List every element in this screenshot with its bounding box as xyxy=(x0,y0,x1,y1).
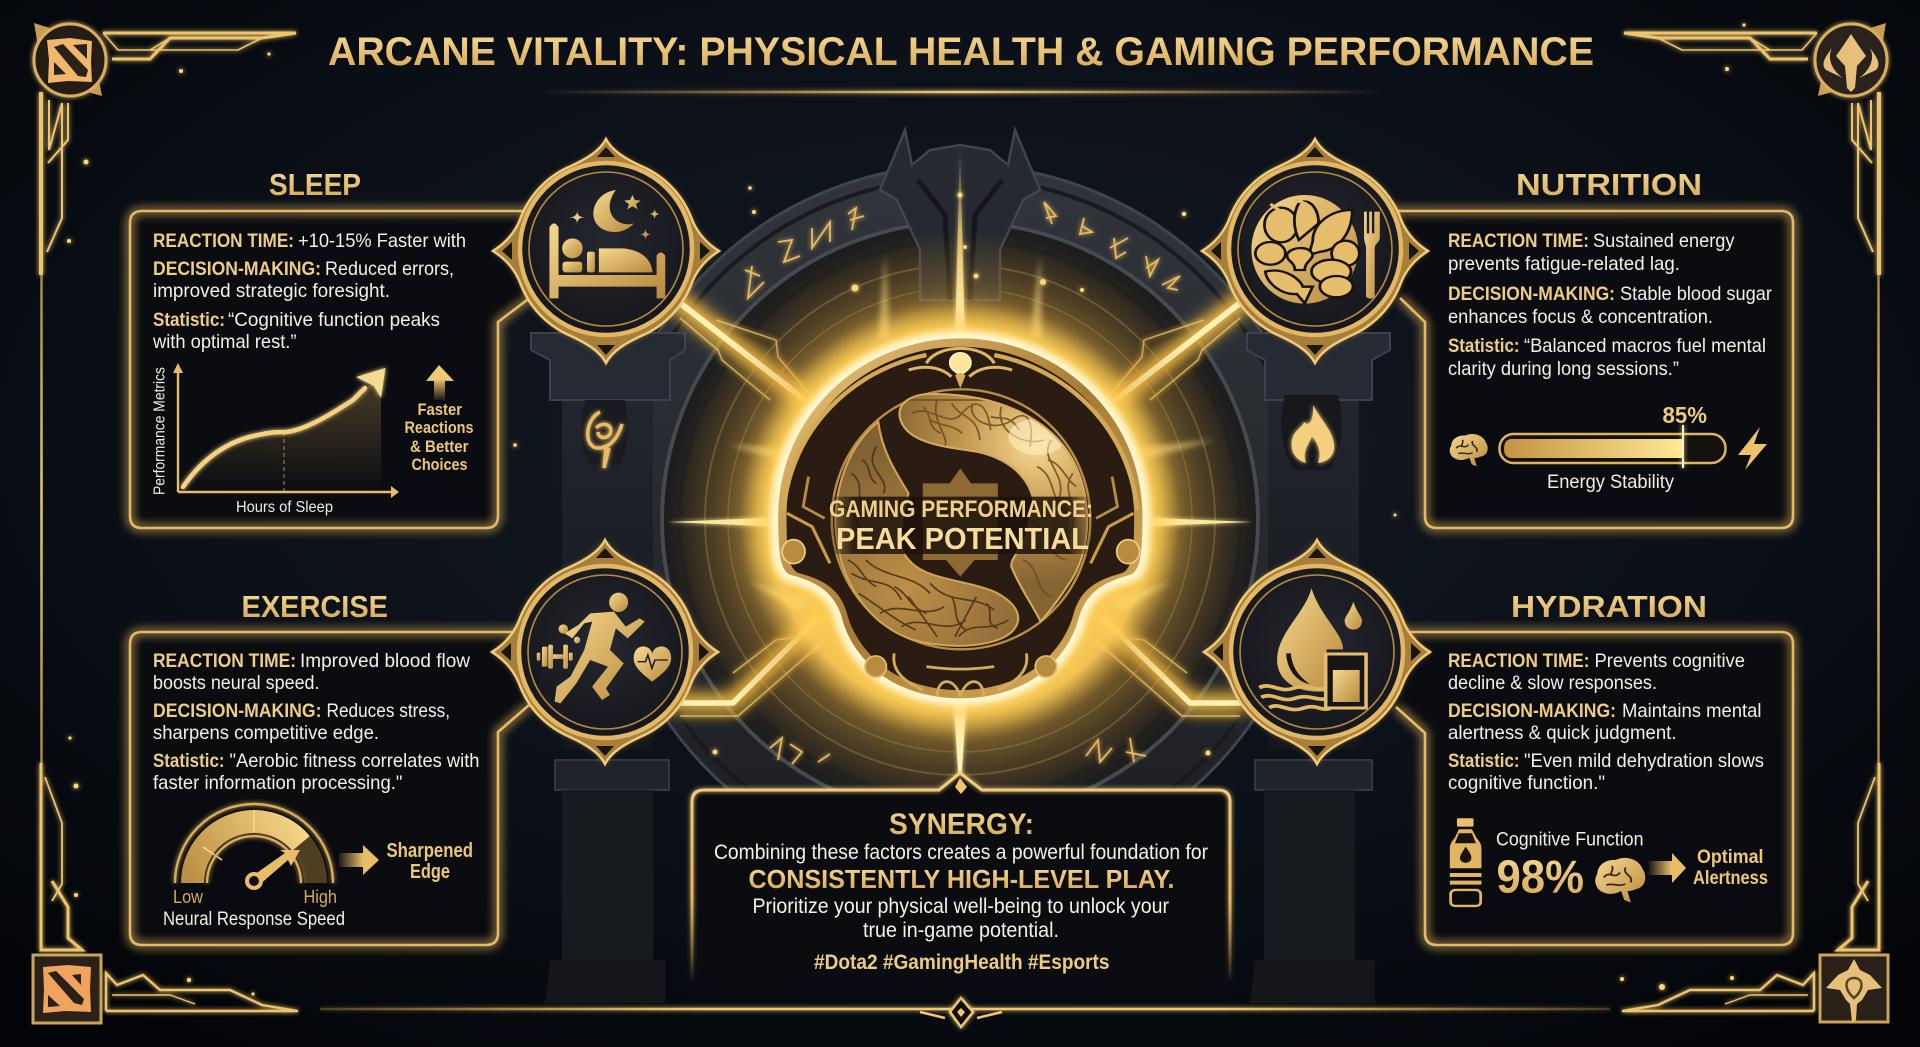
exercise text: faster information processing." xyxy=(153,772,403,794)
chart: neural response gauge: Low xyxy=(173,887,204,907)
title: ARCANE VITALITY: PHYSICAL HEALTH & GAMING PERFORMANCE xyxy=(328,30,1594,74)
hydration text: Maintains mental xyxy=(1622,700,1762,722)
chart: neural response gauge: Neural Response Speed xyxy=(163,909,345,930)
callout: faster reactions xyxy=(404,365,474,474)
panel: sleep xyxy=(130,167,560,528)
chart: neural response gauge: High xyxy=(304,887,337,907)
bottom divider xyxy=(320,998,1610,1027)
nutrition text: enhances focus & concentration. xyxy=(1448,306,1713,328)
exercise text xyxy=(153,650,480,794)
panel: hydration xyxy=(1350,589,1793,945)
emblem glow and rays xyxy=(668,140,1252,810)
panel: nutrition xyxy=(1350,167,1793,528)
energy beams from emblem to medallions xyxy=(680,303,1240,716)
medallion: exercise xyxy=(492,540,718,764)
chart: energy stability bar: Energy Stability xyxy=(1547,471,1674,493)
hydration text: "Even mild dehydration slows xyxy=(1524,750,1764,772)
exercise text: sharpens competitive edge. xyxy=(153,722,379,744)
emblem title: PEAK POTENTIAL xyxy=(836,521,1089,556)
synergy text: Prioritize your physical well-being to unlock your xyxy=(752,895,1169,918)
icon: game logo xyxy=(43,965,91,1013)
nutrition text: Stable blood sugar xyxy=(1620,283,1772,305)
hydration text xyxy=(1448,650,1764,794)
callout: sharpened edge: Sharpened xyxy=(386,840,473,862)
icon: crown emblem xyxy=(1824,34,1878,92)
icon: brain xyxy=(1595,858,1645,902)
callout: optimal alertness: Optimal xyxy=(1697,847,1764,868)
icon: lightning bolt xyxy=(1738,427,1767,470)
runes on the arch ring xyxy=(745,202,1180,764)
hydration text: Statistic: xyxy=(1448,750,1520,772)
emblem title xyxy=(829,496,1093,556)
exercise text: boosts neural speed. xyxy=(153,672,320,694)
sleep text: “Cognitive function peaks xyxy=(228,309,440,331)
exercise text: "Aerobic fitness correlates with xyxy=(230,750,480,772)
chart: neural response gauge xyxy=(163,804,345,930)
sleep text xyxy=(152,230,466,353)
nutrition text: clarity during long sessions.” xyxy=(1448,358,1679,380)
hashtags: #Dota2 #GamingHealth #Esports xyxy=(814,950,1110,974)
callout: faster reactions: Reactions xyxy=(404,418,474,437)
icon: key emblem xyxy=(1826,959,1882,1022)
corner ornament: top right xyxy=(1624,23,1887,275)
chart: energy stability bar xyxy=(1450,402,1767,493)
callout: sharpened edge: Edge xyxy=(410,861,450,883)
stat: cognitive function 98%: 98% xyxy=(1496,851,1584,903)
exercise text: Improved blood flow xyxy=(300,650,471,672)
icon: brain xyxy=(1450,434,1488,466)
exercise text: DECISION-MAKING: xyxy=(153,700,322,722)
callout: optimal alertness: Alertness xyxy=(1693,868,1768,889)
sleep text: DECISION-MAKING: xyxy=(153,258,321,280)
stat: cognitive function 98%: Cognitive Function xyxy=(1496,829,1644,851)
chart: energy stability bar: 85% xyxy=(1662,402,1707,428)
sleep text: +10-15% Faster with xyxy=(298,230,466,252)
icon: runner, dumbbell and heart xyxy=(537,593,671,703)
synergy text: true in-game potential. xyxy=(863,919,1059,942)
hydration text: DECISION-MAKING: xyxy=(1448,700,1616,722)
nutrition text: “Balanced macros fuel mental xyxy=(1524,335,1766,357)
central emblem: gaming performance shield xyxy=(776,337,1144,700)
heading: hydration: HYDRATION xyxy=(1511,589,1707,624)
nutrition text: Statistic: xyxy=(1448,335,1520,357)
chart: performance vs hours of sleep xyxy=(152,363,399,516)
hydration text: Prevents cognitive xyxy=(1594,650,1745,672)
nutrition text: prevents fatigue-related lag. xyxy=(1448,253,1680,275)
synergy text xyxy=(714,841,1208,942)
callout: faster reactions: Faster xyxy=(418,400,462,419)
nutrition text: REACTION TIME: xyxy=(1448,230,1589,252)
side frame lines xyxy=(42,275,1878,763)
central arch with runes xyxy=(605,130,1315,875)
heading: sleep: SLEEP xyxy=(269,167,361,202)
icon: bed, moon and stars xyxy=(549,190,665,298)
medallion: sleep xyxy=(493,139,719,363)
hydration text: REACTION TIME: xyxy=(1448,650,1590,672)
medallion: hydration xyxy=(1204,540,1430,764)
sleep text: Statistic: xyxy=(153,309,225,331)
nutrition text: DECISION-MAKING: xyxy=(1448,283,1615,305)
exercise text: Reduces stress, xyxy=(326,700,450,722)
sleep text: improved strategic foresight. xyxy=(153,280,390,302)
stat: cognitive function 98% xyxy=(1496,829,1644,903)
sleep text: with optimal rest.” xyxy=(152,331,296,353)
chart: performance vs hours of sleep: Performance Metrics xyxy=(152,367,168,495)
heading: exercise: EXERCISE xyxy=(242,589,388,624)
callout: sharpened edge xyxy=(339,840,473,883)
exercise text: Statistic: xyxy=(153,750,224,772)
hydration text: decline & slow responses. xyxy=(1448,672,1657,694)
callout: faster reactions: & Better xyxy=(410,437,469,456)
callout: faster reactions: Choices xyxy=(412,455,468,474)
callout: optimal alertness xyxy=(1649,847,1768,889)
corner ornament: bottom right xyxy=(1622,763,1888,1022)
icon: pillar flame xyxy=(1292,405,1334,463)
heading: nutrition: NUTRITION xyxy=(1516,167,1702,202)
hydration text: cognitive function." xyxy=(1448,772,1605,794)
title underline xyxy=(540,91,1383,93)
stone pillars xyxy=(531,333,1390,1003)
corner ornament: bottom left xyxy=(33,763,298,1023)
icon: food and fork xyxy=(1251,195,1380,304)
panel: synergy xyxy=(692,773,1230,1000)
heading: synergy: SYNERGY: xyxy=(889,808,1034,841)
icon: game logo xyxy=(47,38,92,83)
chart: performance vs hours of sleep: Hours of Sleep xyxy=(236,499,333,516)
hydration text: alertness & quick judgment. xyxy=(1448,722,1676,744)
icon: water bottle xyxy=(1450,818,1481,906)
nutrition text: Sustained energy xyxy=(1593,230,1735,252)
sleep text: REACTION TIME: xyxy=(153,230,294,252)
corner ornament: top left xyxy=(34,23,296,275)
icon: notch ornament xyxy=(955,778,967,794)
synergy text: CONSISTENTLY HIGH-LEVEL PLAY. xyxy=(748,864,1174,894)
icon: pillar swirl rune xyxy=(588,412,622,468)
synergy text: Combining these factors creates a powerful foundation for xyxy=(714,841,1208,864)
panel: exercise xyxy=(130,589,560,945)
medallion: nutrition xyxy=(1202,139,1428,363)
nutrition text xyxy=(1448,230,1772,380)
emblem title: GAMING PERFORMANCE: xyxy=(829,496,1093,523)
icon: water drop and glass xyxy=(1259,588,1366,710)
sleep text: Reduced errors, xyxy=(325,258,454,280)
exercise text: REACTION TIME: xyxy=(153,650,296,672)
